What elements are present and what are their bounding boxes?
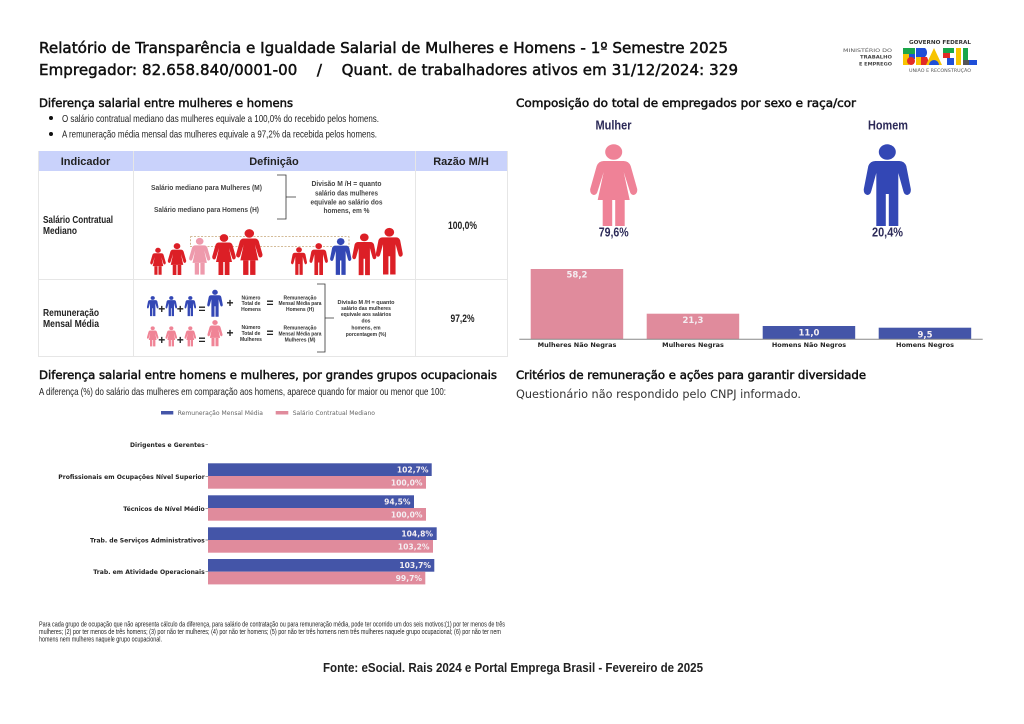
pictogram: homem: Homem	[868, 118, 908, 132]
bar chart: composição: 58,2	[567, 270, 588, 280]
row label: salário contratual mediano: Salário Contratual	[43, 215, 113, 226]
icons: mulheres soma	[147, 320, 274, 347]
subheading: A diferença (%) do salário das mulheres em comparação aos homens, aparece quando for maior ou menor que 100:	[39, 386, 446, 398]
bar chart: grupos ocupacionais: Técnicos de Nível Médio	[123, 505, 205, 513]
row label: remuneração mensal média	[43, 308, 99, 330]
definition: divisão M/H: homens, em	[351, 326, 381, 332]
pictogram: homem: 20,4%	[872, 224, 903, 240]
icons: homens soma	[147, 290, 274, 317]
title: Empregador: 82.658.840/0001-00 / Quant. de trabalhadores ativos em 31/12/2024: 329	[39, 61, 738, 79]
icons: mulheres soma: +	[177, 333, 184, 347]
definition: remuneração média	[278, 284, 334, 352]
definition: remuneração média: Mensal Média para	[278, 332, 322, 338]
heading: diferença salarial: Diferença salarial entre mulheres e homens	[39, 96, 293, 110]
logo: ministério do trabalho e emprego: E EMPREGO	[859, 62, 892, 68]
icons: mulheres soma: +	[158, 333, 165, 347]
logo: governo federal brasil: UNIÃO E RECONSTRUÇÃO	[909, 67, 971, 74]
table header: Definição	[249, 156, 299, 168]
bar chart: composição: Mulheres Não Negras	[538, 341, 616, 349]
bar chart: grupos ocupacionais: 100,0%	[391, 510, 423, 520]
bar chart: grupos ocupacionais: 103,7%	[399, 561, 431, 570]
heading: composição: Composição do total de empregados por sexo e raça/cor	[516, 96, 856, 110]
bar chart: grupos ocupacionais: 94,5%	[384, 498, 411, 506]
pictogram: mulher	[590, 118, 637, 240]
bar chart: composição: 9,5	[917, 330, 933, 340]
definition: divisão M/H: porcentagem (%)	[346, 332, 387, 338]
definition: salário mediano: salário das mulheres	[315, 190, 378, 198]
bar chart: grupos ocupacionais	[58, 441, 437, 584]
row label: salário contratual mediano	[43, 215, 113, 237]
definition: remuneração média: Homens (H)	[286, 307, 314, 313]
row label: salário contratual mediano: Mediano	[43, 226, 77, 237]
definition: número total: Homens	[241, 307, 261, 313]
heading: grupos ocupacionais: Diferença salarial entre homens e mulheres, por grandes grupos ocupacionais	[39, 368, 497, 382]
footnote: Para cada grupo de ocupação que não apresenta cálculo da diferença, para salário de contratação ou para remuneração média, pode ter ocorrido um dos seis motivos:(1) por ter menos de três	[39, 620, 505, 628]
definition: salário mediano: Salário mediano para Homens (H)	[154, 207, 259, 214]
definition: divisão M/H: equivale aos salários	[341, 312, 391, 318]
definition: salário mediano: equivale ao salário dos	[310, 200, 383, 206]
bar chart: grupos ocupacionais: 103,2%	[398, 542, 430, 552]
definition: número total	[240, 296, 262, 343]
legend: Remuneração Mensal Média	[178, 409, 263, 417]
bar chart: grupos ocupacionais: Trab. em Atividade Operacionais	[93, 568, 205, 576]
icons: homens soma: +	[177, 302, 184, 316]
definition: número total: Número	[242, 296, 260, 302]
icons: homens soma: +	[226, 296, 234, 310]
bar chart: composição: Homens Não Negros	[772, 341, 846, 349]
table header: Indicador	[61, 156, 111, 168]
title	[39, 39, 738, 79]
footnote: homens nem mulheres naquele grupo ocupacional.	[39, 634, 162, 644]
bar chart: grupos ocupacionais: Profissionais em Ocupações Nível Superior	[58, 473, 205, 481]
bar chart: grupos ocupacionais: Dirigentes e Gerentes	[130, 441, 205, 449]
bullet list	[49, 113, 379, 140]
definition: divisão M/H: Divisão M /H = quanto	[338, 300, 394, 306]
definition: salário mediano: Divisão M /H = quanto	[312, 181, 382, 188]
text: questionário: Questionário não respondido pelo CNPJ informado.	[516, 387, 801, 401]
legend: Salário Contratual Mediano	[293, 409, 375, 417]
bar chart: composição: Mulheres Negras	[662, 341, 724, 349]
table header: Razão M/H	[433, 156, 489, 168]
row label: remuneração mensal média: Mensal Média	[43, 319, 99, 330]
legend	[161, 409, 375, 417]
definition: remuneração média: Mulheres (M)	[285, 338, 316, 344]
table header	[38, 151, 508, 171]
pictogram: mulher: Mulher	[596, 118, 632, 132]
bar chart: composição	[519, 269, 983, 349]
logo: governo federal brasil	[903, 40, 977, 74]
definition: divisão M/H: salário das mulheres	[341, 306, 391, 312]
icons: mulheres soma: =	[266, 326, 274, 340]
icons: homens soma: =	[266, 296, 274, 310]
definition: número total: Mulheres	[240, 337, 262, 343]
bar chart: grupos ocupacionais: 104,8%	[401, 530, 433, 538]
icons: mulheres soma: +	[226, 326, 234, 340]
source: Fonte: eSocial. Rais 2024 e Portal Emprega Brasil - Fevereiro de 2025	[323, 661, 703, 675]
icons: homens soma: =	[198, 302, 206, 316]
bullet list: A remuneração média mensal das mulheres equivale a 97,2% da recebida pelos homens.	[62, 128, 377, 140]
bar chart: composição: 21,3	[683, 316, 704, 326]
logo: governo federal brasil: GOVERNO FEDERAL	[909, 40, 972, 46]
definition: divisão M/H	[338, 300, 394, 338]
bar chart: grupos ocupacionais: Trab. de Serviços Administrativos	[90, 536, 205, 544]
definition: remuneração média: Remuneração	[283, 296, 317, 302]
definition: número total: Número	[242, 325, 260, 331]
value: 100,0%: 100,0%	[448, 220, 477, 232]
bar chart: composição: Homens Negros	[896, 341, 954, 349]
logo: ministério do trabalho e emprego	[843, 46, 893, 68]
bar chart: composição: 11,0	[799, 328, 820, 338]
bar chart: grupos ocupacionais: 99,7%	[396, 574, 422, 583]
logo: ministério do trabalho e emprego: MINISTÉRIO DO	[843, 46, 893, 54]
heading: critérios: Critérios de remuneração e ações para garantir diversidade	[516, 368, 866, 382]
pictogram: homem	[864, 118, 911, 240]
footnote	[39, 620, 505, 644]
median comparison icons	[150, 228, 403, 275]
table	[38, 151, 508, 357]
definition: salário mediano	[151, 175, 383, 219]
pictogram: mulher: 79,6%	[599, 224, 629, 240]
row label: remuneração mensal média: Remuneração	[43, 308, 99, 319]
bar chart: grupos ocupacionais: 100,0%	[391, 478, 423, 488]
footnote: mulheres; (2) por ter menos de três homens; (3) por não ter mulheres; (4) por não ter homens; (5) por não ter três homens nem três mulheres naquele grupo ocupacional; (6) por não ter nem	[39, 627, 501, 636]
definition: salário mediano: homens, em %	[324, 208, 370, 215]
definition: remuneração média: Mensal Média para	[278, 301, 322, 307]
bar chart: grupos ocupacionais: 102,7%	[397, 466, 429, 474]
icons: homens soma: +	[158, 302, 165, 316]
icons: mulheres soma: =	[198, 333, 206, 347]
definition: número total: Total de	[242, 331, 261, 337]
definition: número total: Total de	[242, 301, 261, 307]
bullet list: O salário contratual mediano das mulheres equivale a 100,0% do recebido pelos homens.	[62, 113, 379, 125]
logo: ministério do trabalho e emprego: TRABALHO	[860, 54, 892, 60]
definition: salário mediano: Salário mediano para Mulheres (M)	[151, 185, 262, 192]
title: Relatório de Transparência e Igualdade Salarial de Mulheres e Homens - 1º Semestre 2025	[39, 39, 728, 57]
value: 97,2%: 97,2%	[450, 313, 475, 325]
definition: remuneração média: Remuneração	[283, 326, 317, 332]
definition: divisão M/H: dos	[362, 318, 371, 324]
